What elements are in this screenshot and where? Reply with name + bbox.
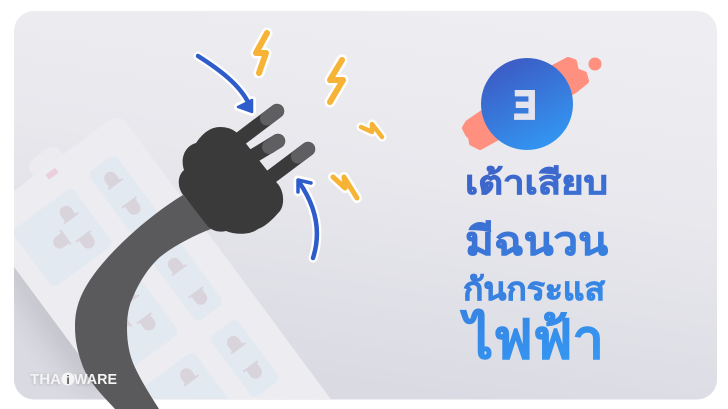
logo: Thaiware watermark: i [66,373,70,387]
arrow: lower blue arrow [298,180,317,258]
illustration: plug [179,111,308,234]
icon: lightning bolt 4 [333,177,357,198]
icon: lightning bolt 2 [330,60,343,102]
heading: Thai title: มีฉนวน [465,220,608,264]
logo: Thaiware watermark: WARE [75,372,119,388]
logo: Thaiware watermark: THA [30,372,60,388]
logo: Thaiware watermark [30,372,119,388]
logo: Thaiware watermark: THA [30,372,62,388]
badge: number 3: Ǝ [514,82,536,128]
arrow: upper blue arrow [198,56,252,112]
heading: Thai title [460,164,608,370]
logo: Thaiware watermark: WARE [74,372,117,388]
heading: Thai title: เต้าเสียบ [465,164,608,201]
icon: lightning bolt 1 [256,33,267,73]
illustration: power strip [14,168,330,400]
badge: number 3 [465,58,602,150]
illustration: power cable [75,195,211,409]
heading: Thai title: ไฟฟ้า [460,308,604,370]
icon: lightning bolt 3 [361,124,382,137]
heading: Thai title: กันกระแส [463,271,605,307]
